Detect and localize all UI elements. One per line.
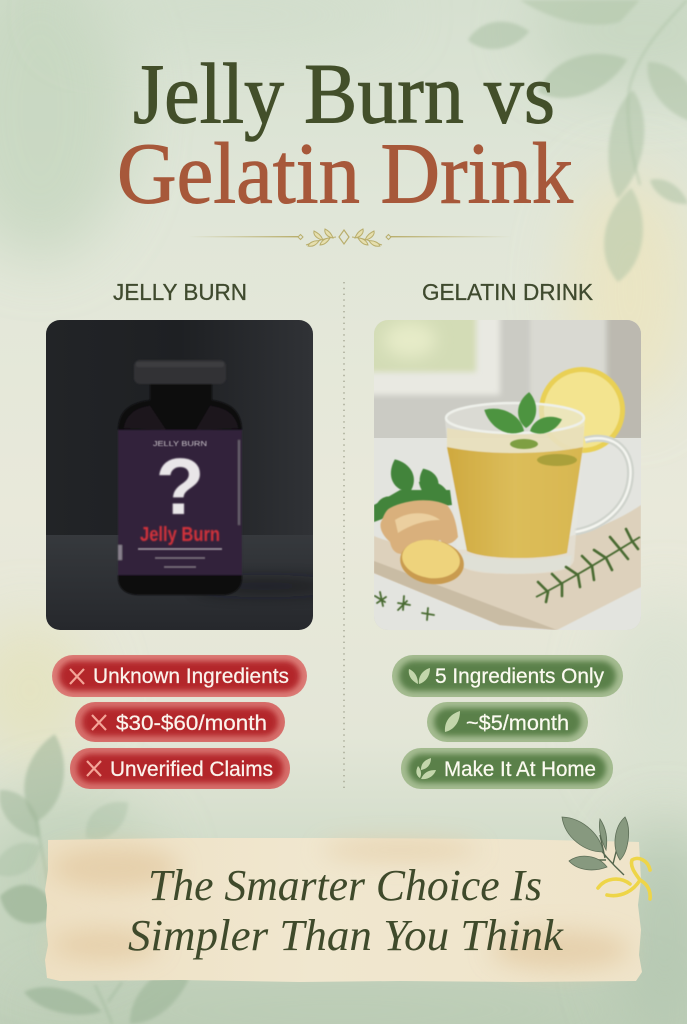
bottle label text: Jelly Burn	[140, 524, 220, 546]
bottle	[118, 360, 242, 595]
icon: leaf	[445, 711, 460, 732]
title	[117, 46, 573, 222]
pill: 5 Ingredients Only	[392, 655, 623, 697]
icon: cross	[92, 715, 106, 730]
bottle shadow	[195, 580, 335, 592]
background leaves: bottom left	[0, 730, 205, 1024]
pill: Unverified Claims	[70, 748, 290, 789]
photo: gelatin drink mug	[364, 310, 648, 630]
column heading: Gelatin Drink: GELATIN DRINK	[422, 279, 594, 305]
pill: Make It At Home: Make It At Home	[444, 758, 596, 781]
mint behind ginger	[374, 458, 452, 522]
pill: Unknown Ingredients: Unknown Ingredients	[93, 665, 289, 688]
ornamental divider	[188, 229, 512, 246]
title line: Jelly Burn vs: Jelly Burn vs	[133, 46, 555, 142]
icon: leaf pair	[409, 668, 430, 684]
photo: Jelly Burn bottle	[46, 320, 335, 630]
ginger root	[380, 500, 467, 588]
mug glass	[445, 403, 631, 574]
pill: 5 Ingredients Only: 5 Ingredients Only	[435, 665, 604, 688]
cloth	[374, 505, 641, 630]
pill: Make It At Home	[401, 748, 613, 789]
icon: cross	[87, 761, 101, 776]
banner: torn paper	[45, 838, 642, 982]
bottle label text: ?	[156, 442, 204, 531]
mint sprig	[479, 391, 577, 466]
background leaves: top right	[466, 0, 687, 285]
thyme sprig	[375, 529, 640, 620]
banner text: Simpler Than You Think	[128, 911, 564, 960]
column heading: Jelly Burn: JELLY BURN	[113, 279, 247, 305]
icon: cross	[70, 669, 84, 684]
pill: price per month: $30-$60/month	[116, 712, 267, 735]
pill: about $5 per month: ~$5/month	[466, 712, 569, 735]
banner text	[128, 861, 564, 960]
pill: about $5 per month	[427, 702, 588, 742]
title line: Gelatin Drink: Gelatin Drink	[117, 124, 573, 222]
pill: Unknown Ingredients	[52, 655, 307, 697]
pill: price per month	[75, 702, 285, 742]
pill: Unverified Claims: Unverified Claims	[110, 758, 273, 781]
icon: leaf sprig with lemon peel	[562, 817, 650, 899]
column divider	[343, 282, 345, 790]
paper stains	[50, 841, 630, 970]
lemon slice	[539, 367, 625, 453]
bottle label text: JELLY BURN	[153, 439, 207, 448]
icon: herb sprig	[416, 758, 436, 779]
banner text: The Smarter Choice Is	[148, 861, 542, 910]
bottle label text	[138, 439, 222, 568]
